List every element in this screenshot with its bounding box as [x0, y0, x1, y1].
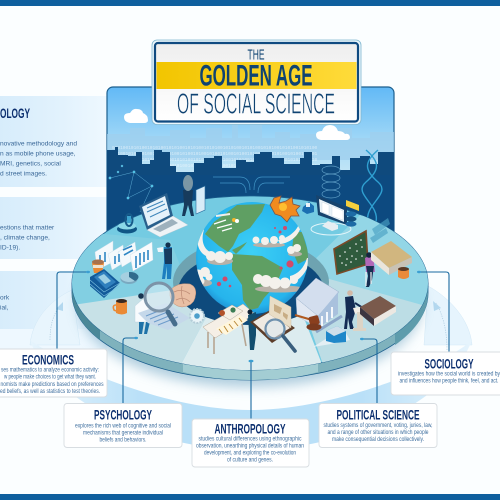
text: questions: estions that matter [0, 224, 55, 232]
tablet sign [196, 186, 205, 214]
person with clipboard [157, 242, 172, 279]
icon: yellow tag [346, 200, 359, 211]
icon: large magnifier [145, 283, 175, 324]
icon: open book with map [250, 296, 295, 343]
circuit lines [213, 177, 290, 193]
text: questions: ID-19). [0, 244, 20, 252]
text: political science: and a range of other situations in which people [328, 429, 429, 436]
icon: smartwatch on disc [117, 214, 137, 234]
text: economics: w people make choices to get what they want. [3, 374, 96, 380]
icon: gavel [295, 315, 322, 330]
icon: brown books [360, 296, 396, 326]
binary digits [112, 146, 317, 167]
icon: small magnifier [266, 320, 295, 351]
binary digits: 0101001010100101010010101001010100101010010101001010100101010010101001010100 [112, 145, 318, 151]
text: methodology: n as mobile phone usage, [0, 150, 76, 158]
right sector [316, 215, 428, 306]
heading: methodology: OLOGY [0, 105, 30, 121]
icon: tan books [371, 241, 412, 275]
icon: database stack [346, 211, 356, 227]
faint skyline [107, 122, 394, 160]
card: economics [0, 349, 107, 397]
title plaque [152, 40, 361, 124]
ice sheet and pills [214, 220, 232, 231]
connector: sociology [417, 271, 449, 352]
binary digits: 0010101001010100101010010101001010100101010010101001010100101010010101001010 [112, 157, 318, 163]
top surface [72, 196, 428, 370]
heading: psychology: PSYCHOLOGY [94, 406, 152, 422]
cloud left [124, 109, 148, 123]
heading: economics: ECONOMICS [22, 352, 74, 368]
top band [0, 0, 500, 6]
icon: brain [170, 284, 196, 307]
dna helix [362, 150, 382, 222]
data network [109, 165, 153, 212]
text: anthropology: observation, unearthing physical details of human [196, 442, 304, 450]
text: sociology [398, 370, 500, 384]
icon: striped book [138, 303, 190, 330]
virus markers [217, 226, 294, 287]
icon: monitor [311, 195, 351, 235]
text: anthropology: development, and exploring the co-evolution [204, 450, 296, 456]
icon: gear [190, 309, 204, 323]
title line: golden age: GOLDEN AGE [200, 60, 312, 92]
title line: of social science: OF SOCIAL SCIENCE [177, 88, 335, 120]
africa edge [292, 232, 308, 264]
charts: floating papers [95, 241, 153, 271]
card: psychology [64, 404, 182, 448]
text: network [0, 294, 10, 312]
text: psychology: beliefs and behaviors. [100, 436, 147, 444]
background arcs under platform [30, 223, 472, 450]
text: anthropology [196, 436, 304, 464]
anthropology sector [182, 316, 322, 370]
anthropology display table [203, 304, 255, 354]
cloud bands [194, 242, 305, 292]
connector: economics [57, 271, 90, 349]
dotted arrow arcs [50, 303, 447, 350]
text: political science: studies systems of government, voting, juries, law, [324, 422, 433, 429]
faint data sheets [370, 218, 390, 243]
title line: the: THE [248, 46, 264, 64]
icon: wildfire explosion [270, 196, 300, 222]
text: economics: ed beliefs, as well as statistics to test theories. [0, 388, 100, 395]
scientist in white coat [135, 293, 150, 334]
text: economics: nomists make predictions based on preferences [0, 381, 104, 388]
text: questions: , climate change, [0, 234, 50, 242]
binary digits: 1010010100101001010010100101001010010100101001010010100101001010010100101001 [112, 151, 318, 157]
card: anthropology [192, 419, 309, 467]
south america [232, 254, 283, 310]
backdrop: city skyline [107, 87, 394, 250]
card: sociology [391, 352, 500, 395]
cloud right [316, 125, 350, 140]
politician at podium [344, 290, 363, 329]
left panel: data and methodology [0, 96, 107, 187]
icon: ballot box [313, 326, 350, 347]
text: anthropology: of culture and genes. [227, 456, 273, 464]
icon: blue lock device [302, 202, 314, 214]
icon: podium [353, 306, 366, 331]
person at table [248, 310, 256, 350]
text: psychology: explores the rich web of cognitive and social [75, 422, 171, 430]
text: economics: ses mathematics to analyze economic activity: [1, 366, 99, 374]
text: economics [0, 366, 104, 395]
globe [192, 202, 310, 314]
icon: coffee mug [113, 299, 127, 314]
connector: psychology [123, 337, 138, 403]
connector: political science [360, 338, 377, 403]
signal rings [322, 166, 340, 198]
icon: stacked books [90, 269, 120, 298]
text: methodology: d street images. [0, 170, 47, 178]
left sector [72, 234, 180, 304]
teacher [365, 252, 375, 287]
platform disk [60, 196, 440, 385]
left panel: questions [0, 197, 107, 259]
text: methodology: novative methodology and [0, 140, 77, 148]
icon: laptop [139, 193, 188, 237]
text: network: ork [0, 294, 10, 302]
political science sector [308, 279, 422, 362]
north america [205, 204, 265, 252]
rim [72, 283, 428, 380]
connector: anthropology [248, 360, 254, 419]
text: questions [0, 224, 55, 252]
icon: orange mug [398, 267, 409, 279]
text: psychology [75, 422, 171, 444]
icon: takeaway cup [92, 260, 104, 273]
chalkboard [334, 231, 368, 274]
text: political science [324, 422, 433, 443]
psychology sector [77, 290, 206, 364]
shadow under the disk [78, 223, 422, 387]
heading: political science: POLITICAL SCIENCE [336, 406, 420, 422]
dark skyline [107, 147, 394, 175]
chart: pie disc [120, 272, 138, 284]
icon: courthouse [296, 278, 342, 332]
person with tablet at back [182, 175, 205, 216]
text: methodology: MRI, genetics, social [0, 160, 61, 168]
hole around the globe [173, 239, 329, 325]
bottom band [0, 494, 500, 500]
text: political science: make consequential decisions collectively. [332, 436, 424, 443]
heading: anthropology: ANTHROPOLOGY [214, 420, 286, 436]
binary digits: 1001010010100101001010010100101001010010100101001010010100101001010010100101 [112, 163, 318, 169]
left panel: network [0, 271, 107, 349]
text: psychology: mechanisms that generate individual [83, 430, 163, 436]
text: network: ial, [0, 304, 9, 312]
card: political science [319, 404, 437, 448]
text: anthropology: studies cultural differences using ethnographic [198, 436, 302, 442]
text: methodology [0, 140, 77, 178]
